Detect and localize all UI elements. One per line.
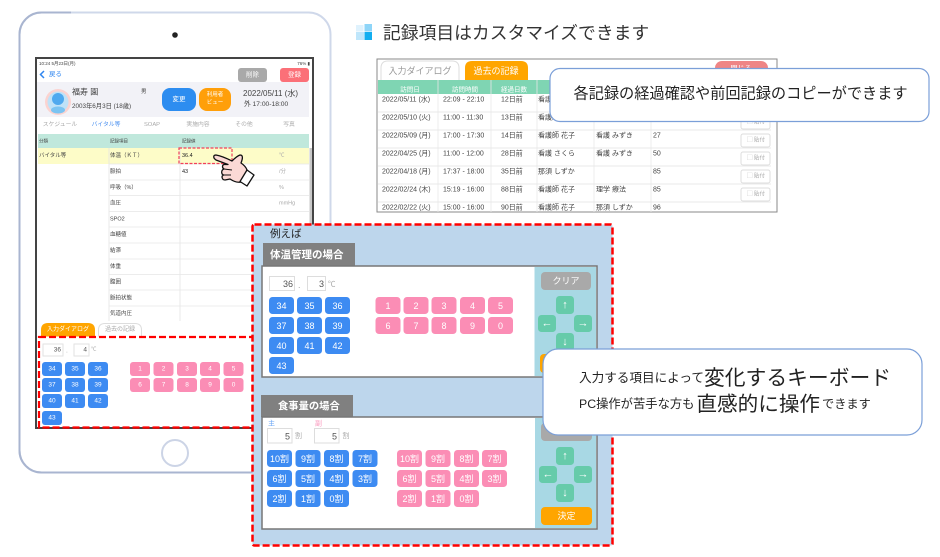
- blue tens keys: 34: [276, 301, 287, 311]
- table header: [378, 80, 776, 94]
- pink digit keys: 8: [185, 382, 189, 388]
- control buttons: [538, 272, 592, 373]
- tabs: [381, 61, 768, 81]
- pink side-dish keys: 9割: [431, 454, 445, 464]
- pink digit keys: 0: [498, 321, 503, 331]
- table rows: 看護 さくら: [538, 148, 575, 158]
- pink side-dish keys: 8割: [459, 454, 474, 464]
- paste buttons: ▢ 貼付: [747, 190, 766, 198]
- table rows: 看護師 花子: [538, 202, 575, 212]
- blue main-dish keys: 9割: [301, 454, 315, 464]
- vitals table: 呼吸（%）: [110, 184, 137, 191]
- value inputs: 36: [283, 279, 293, 289]
- navigation bar: [40, 68, 309, 82]
- table rows: 2022/05/09 (月): [382, 132, 431, 140]
- pink side-dish keys: 4割: [459, 474, 474, 484]
- table rows: 15:00 - 16:00: [443, 204, 484, 212]
- pink digit keys: 4: [470, 301, 475, 311]
- vitals table: 脈拍: [110, 167, 121, 175]
- tablet device: [20, 12, 330, 472]
- value inputs: 5: [332, 432, 337, 442]
- vitals table: 血糖値: [110, 230, 127, 238]
- table rows: 2022/02/22 (火): [382, 204, 431, 212]
- panel: temperature management: [262, 243, 597, 377]
- tab heading: 食事量の場合: [278, 400, 340, 412]
- pink digit keys: 2: [162, 366, 166, 372]
- table header: 訪問日: [400, 84, 420, 94]
- control buttons: →: [578, 468, 588, 480]
- section tabs: スケジュール: [43, 121, 77, 128]
- tab heading: 体温管理の場合: [270, 248, 344, 261]
- table rows: 85: [653, 186, 661, 194]
- vitals table: 脈拍状態: [110, 294, 133, 302]
- blue main-dish keys: 0割: [329, 494, 344, 504]
- pink digit keys: 6: [138, 382, 142, 388]
- callout: adaptive keyboard: 入力する項目によって変化するキーボード: [579, 366, 891, 390]
- value inputs: 3: [319, 279, 324, 289]
- section tabs: その他: [235, 120, 253, 128]
- blue main-dish keys: 6割: [272, 474, 287, 484]
- blue tens keys: [42, 362, 108, 425]
- blue tens keys: 36: [332, 301, 343, 311]
- status bar: 76% ▮: [297, 61, 311, 66]
- callout: adaptive keyboard: [543, 349, 922, 435]
- vitals table: 分類: [39, 138, 48, 144]
- blue main-dish keys: 8割: [329, 454, 344, 464]
- pink side-dish keys: [397, 450, 507, 507]
- pink digit keys: 3: [441, 301, 447, 311]
- blue main-dish keys: 1割: [301, 494, 315, 504]
- status bar: [39, 61, 311, 67]
- blue tens keys: 39: [332, 321, 343, 331]
- value inputs: 副: [315, 418, 322, 428]
- pink digit keys: 3: [185, 366, 189, 372]
- blue tens keys: 40: [276, 341, 287, 351]
- pink side-dish keys: 2割: [402, 494, 417, 504]
- table rows: 那須 しずか: [596, 202, 633, 212]
- pink digit keys: 1: [385, 301, 391, 311]
- table rows: 看護 みずき: [596, 130, 633, 140]
- table rows: 2022/04/18 (月): [382, 168, 431, 176]
- blue tens keys: 34: [48, 366, 56, 372]
- dialog tabs: 入力ダイアログ: [47, 325, 89, 333]
- value inputs: 主: [268, 418, 275, 428]
- navigation bar: 登録: [288, 70, 302, 78]
- tab heading: [263, 243, 355, 266]
- blue main-dish keys: 5割: [301, 474, 315, 484]
- keypad: temperature on tablet: .: [66, 348, 68, 354]
- pink digit keys: 7: [413, 321, 419, 331]
- table rows: 85: [653, 168, 661, 176]
- pink digit keys: 9: [470, 321, 475, 331]
- vitals table: ℃: [279, 152, 285, 159]
- pink digit keys: 9: [208, 382, 212, 388]
- blue tens keys: 41: [304, 341, 315, 351]
- pink side-dish keys: 0割: [459, 494, 474, 504]
- control buttons: ↓: [562, 336, 568, 348]
- control buttons: ↑: [562, 299, 568, 311]
- callout: record history: 各記録の経過確認や前回記録のコピーができます: [573, 86, 908, 102]
- blue main-dish keys: 3割: [358, 474, 372, 484]
- tabs: 閉じる: [730, 64, 752, 72]
- table rows: 17:37 - 18:00: [443, 168, 484, 176]
- pink side-dish keys: 5割: [431, 474, 445, 484]
- pink digit keys: 5: [232, 366, 236, 372]
- status bar: 10:24 5月23日(月): [39, 61, 76, 67]
- table rows: 看護師 花子: [538, 184, 575, 194]
- section tabs: [43, 120, 295, 128]
- blue tens keys: 42: [94, 398, 102, 404]
- pink digit keys: [376, 297, 513, 334]
- pink digit keys: 0: [232, 382, 236, 388]
- table rows: 2022/02/24 (木): [382, 184, 431, 194]
- patient header: ビュー: [207, 98, 223, 106]
- blue main-dish keys: 10割: [270, 454, 289, 464]
- vitals table: 記録値: [182, 138, 196, 144]
- tab heading: [261, 395, 353, 417]
- table rows: 11:00 - 12:00: [443, 150, 484, 158]
- control buttons: ←: [542, 318, 552, 330]
- pink side-dish keys: 7割: [487, 454, 502, 464]
- blue tens keys: 40: [48, 398, 56, 404]
- value inputs: ℃: [328, 280, 336, 288]
- table rows: 90日前: [501, 202, 523, 212]
- pink digit keys: [130, 362, 244, 392]
- table rows: 22:09 - 22:10: [443, 96, 484, 104]
- pink side-dish keys: 10割: [400, 454, 419, 464]
- paste buttons: ▢ 貼付: [747, 154, 766, 162]
- keypad: temperature on tablet: [42, 344, 244, 425]
- control buttons: ↓: [562, 487, 568, 499]
- patient header: 男: [141, 88, 147, 95]
- blue tens keys: 35: [71, 366, 79, 372]
- patient header: [37, 82, 309, 117]
- vitals table: 体重: [110, 262, 122, 270]
- blue tens keys: 42: [332, 341, 343, 351]
- icon: pointing hand: [214, 155, 254, 186]
- pink digit keys: 1: [138, 366, 142, 372]
- blue main-dish keys: [267, 450, 378, 507]
- table rows: 96: [653, 204, 661, 212]
- dialog tabs: 過去の記録: [105, 325, 135, 333]
- red dashed keypad highlight: [39, 337, 254, 428]
- blue tens keys: 43: [48, 414, 56, 422]
- vitals table: 血圧: [110, 198, 122, 206]
- blue tens keys: 38: [71, 382, 79, 388]
- paste buttons: [741, 116, 770, 201]
- callout: record history: [550, 68, 929, 122]
- past records screenshot: [377, 59, 777, 212]
- icon: four squares: [356, 24, 372, 40]
- table rows: 理学 療法: [596, 184, 626, 194]
- control buttons: ←: [542, 468, 554, 480]
- tabs: 入力ダイアログ: [388, 65, 452, 76]
- blue tens keys: 37: [48, 382, 56, 388]
- table rows: 17:00 - 17:30: [443, 132, 484, 140]
- value inputs: .: [298, 280, 301, 290]
- camera: [172, 32, 178, 38]
- table rows: 看護師 花子: [538, 130, 575, 140]
- pink side-dish keys: 3割: [487, 474, 502, 484]
- pink digit keys: 8: [441, 321, 447, 331]
- blue tens keys: 36: [94, 366, 102, 372]
- table rows: 2022/04/25 (月): [382, 150, 431, 158]
- control buttons: [539, 423, 592, 525]
- pink side-dish keys: 6割: [402, 474, 417, 484]
- pink digit keys: 5: [498, 301, 503, 311]
- vitals table: 記録項目: [110, 138, 128, 144]
- section heading: 記録項目はカスタマイズできます: [383, 23, 649, 43]
- blue main-dish keys: 2割: [272, 494, 287, 504]
- pink digit keys: 2: [413, 301, 419, 311]
- vitals table: SPO2: [110, 216, 125, 222]
- control buttons: →: [578, 318, 588, 330]
- paste buttons: ▢ 貼付: [747, 136, 766, 144]
- vitals table: [38, 134, 312, 321]
- patient header: 2003年6月3日 (18歳): [72, 101, 131, 110]
- control buttons: クリア: [552, 276, 580, 286]
- blue tens keys: 39: [94, 382, 102, 388]
- home button: [162, 440, 188, 466]
- patient header: 2022/05/11 (水): [243, 88, 298, 98]
- table rows: 2022/05/11 (水): [382, 94, 430, 104]
- table rows: 13日前: [501, 112, 523, 122]
- vitals table: 36.4: [182, 153, 193, 159]
- patient header: 変更: [172, 94, 186, 103]
- value inputs: 5: [285, 432, 290, 442]
- panel: meal amount: [261, 395, 597, 529]
- tabs: 過去の記録: [473, 65, 519, 76]
- blue tens keys: [269, 297, 350, 374]
- selected cell highlight: [179, 148, 232, 164]
- table rows: 50: [653, 150, 661, 158]
- vitals table: 気道内圧: [110, 309, 133, 317]
- section tabs: 実施内容: [186, 120, 210, 128]
- vitals table: %: [279, 185, 284, 191]
- dialog tabs: [41, 323, 142, 336]
- value inputs: [268, 418, 350, 443]
- value inputs: 割: [342, 431, 350, 440]
- keypad: temperature on tablet: ℃: [91, 346, 97, 353]
- blue main-dish keys: 7割: [358, 454, 372, 464]
- vitals table: 腹囲: [110, 278, 122, 286]
- vitals table: バイタル等: [39, 151, 67, 159]
- vitals table: 43: [182, 169, 188, 175]
- control buttons: 決定: [557, 510, 576, 521]
- keypad: temperature on tablet: 4: [83, 346, 87, 354]
- keypad: temperature on tablet: 36: [54, 346, 61, 354]
- blue tens keys: 38: [304, 321, 315, 331]
- patient header: 外 17:00-18:00: [244, 99, 289, 108]
- table rows: 11:00 - 11:30: [443, 114, 483, 122]
- table rows: 12日前: [501, 94, 523, 104]
- table rows: 看護師 花子: [538, 94, 575, 104]
- section tabs: 写真: [283, 120, 295, 128]
- table rows: 看護師 花子: [538, 112, 575, 122]
- table rows: 88日前: [501, 184, 523, 194]
- blue tens keys: 35: [304, 301, 315, 311]
- navigation bar: 戻る: [49, 70, 62, 78]
- pink digit keys: 7: [162, 382, 166, 388]
- value inputs: [270, 276, 336, 290]
- section tabs: SOAP: [144, 122, 160, 128]
- vitals table: 体温（ＫＴ）: [110, 151, 143, 159]
- patient header: 福寿 園: [72, 86, 98, 96]
- pink digit keys: 4: [208, 366, 212, 372]
- table rows: 15:19 - 16:00: [443, 186, 484, 194]
- table rows: 那須 しずか: [538, 166, 575, 176]
- patient header: 利用者: [207, 90, 224, 98]
- paste buttons: ▢ 貼付: [747, 172, 766, 180]
- blue tens keys: 37: [276, 321, 287, 331]
- vitals table: 結滞: [110, 246, 122, 254]
- table rows: [378, 80, 771, 212]
- table rows: 35日前: [501, 166, 523, 176]
- tablet screen: [36, 58, 313, 428]
- table rows: 2022/05/10 (火): [382, 114, 431, 122]
- table rows: 14日前: [501, 130, 523, 140]
- callout: adaptive keyboard: PC操作が苦手な方も直感的に操作できます: [579, 392, 871, 416]
- blue tens keys: 43: [276, 361, 287, 371]
- navigation bar: 削除: [246, 70, 260, 78]
- table rows: 27: [653, 132, 661, 140]
- value inputs: 割: [295, 431, 302, 440]
- vitals table: mmHg: [279, 200, 295, 206]
- paste buttons: ▢ 貼付: [747, 118, 766, 126]
- vitals table: /分: [279, 167, 287, 175]
- label: for example: 例えば: [270, 227, 302, 240]
- blue main-dish keys: 4割: [329, 474, 344, 484]
- section tabs: バイタル等: [92, 120, 121, 128]
- table rows: 看護 みずき: [596, 148, 633, 158]
- panel: keyboard examples: [252, 224, 612, 546]
- pink side-dish keys: 1割: [431, 494, 445, 504]
- table header: 経過日数: [501, 84, 528, 94]
- blue tens keys: 41: [71, 398, 79, 404]
- control buttons: ↑: [562, 450, 568, 462]
- table header: 訪問時間: [452, 84, 478, 94]
- pink digit keys: 6: [385, 321, 391, 331]
- table rows: 28日前: [501, 148, 523, 158]
